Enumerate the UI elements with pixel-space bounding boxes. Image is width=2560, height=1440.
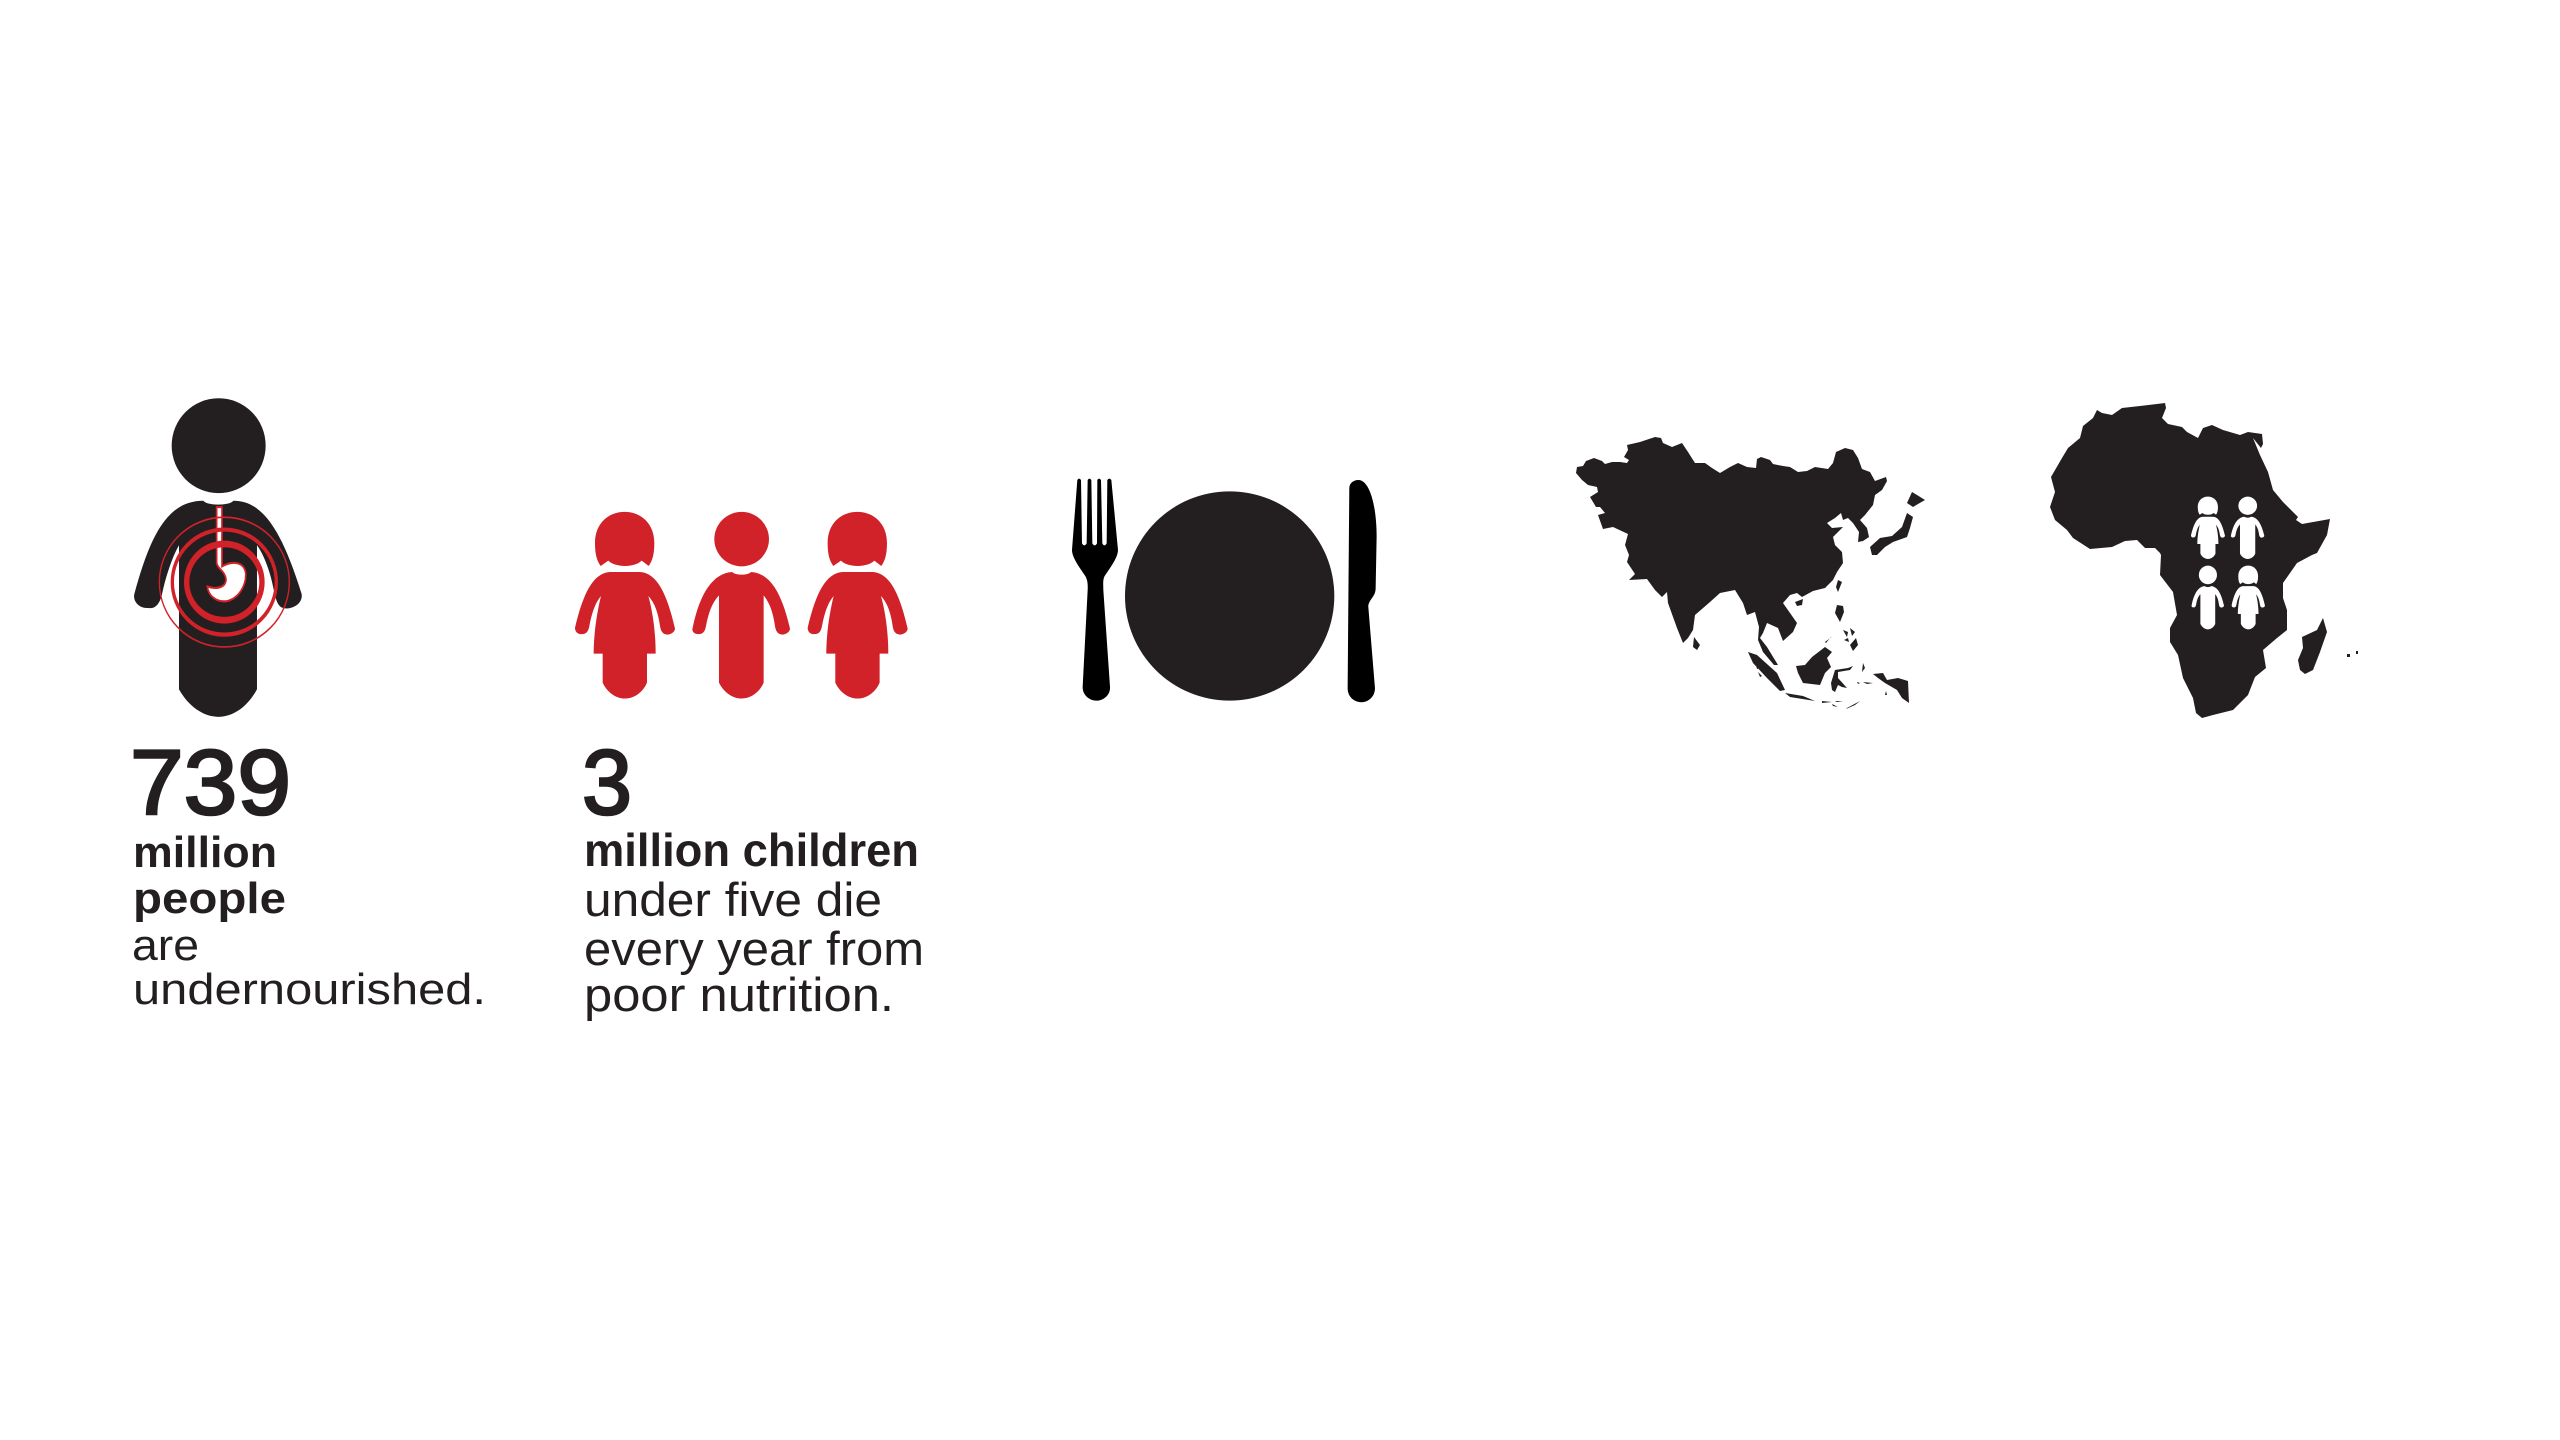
child: girl bottom right: [2232, 566, 2265, 629]
caption: million people are undernourished: undernourished.: [133, 965, 486, 1014]
statistic: 739: 739: [130, 732, 291, 834]
caption: million children under five die every year from poor nutrition: million children: [584, 824, 919, 876]
fork: [1072, 479, 1118, 701]
child: girl left: [575, 512, 675, 699]
white children: [2191, 497, 2265, 629]
caption: million children under five die every year from poor nutrition: under five die: [584, 873, 882, 926]
icon: three red children: [575, 512, 908, 699]
child: boy bottom left: [2192, 566, 2224, 629]
child: boy centre: [692, 512, 790, 699]
person body: [134, 501, 302, 717]
map: Asia: [1576, 437, 1925, 709]
caption: million children under five die every year from poor nutrition: every year from: [584, 922, 924, 975]
child: boy top right: [2231, 497, 2264, 559]
Asian mainland: [1576, 437, 1887, 665]
child: girl right: [808, 512, 908, 699]
Madagascar and small islands: [2298, 618, 2358, 674]
caption: million people are undernourished: [132, 828, 486, 1014]
caption: million children under five die every year from poor nutrition: [584, 824, 924, 1021]
plate: [1125, 491, 1334, 701]
knife: [1348, 480, 1377, 702]
stomach and oesophagus: [207, 507, 246, 601]
panel: undernourished people: [130, 398, 486, 1014]
panel: child deaths: [575, 512, 924, 1021]
map: Africa with four white children: [2050, 403, 2358, 718]
icon: person with stomach pain rings: [134, 398, 302, 717]
caption: million children under five die every year from poor nutrition: poor nutrition.: [584, 968, 894, 1021]
statistic: 3: 3: [582, 732, 632, 834]
caption: million people are undernourished: people: [133, 874, 286, 923]
pain rings: [159, 517, 289, 647]
Asian islands: [1693, 492, 1925, 709]
African continent: [2050, 403, 2330, 718]
caption: million people are undernourished: million: [133, 828, 277, 877]
person head: [172, 398, 266, 493]
caption: million people are undernourished: are: [132, 921, 199, 970]
child: girl top left: [2191, 497, 2225, 559]
icon: fork, plate and knife: [1072, 479, 1377, 702]
